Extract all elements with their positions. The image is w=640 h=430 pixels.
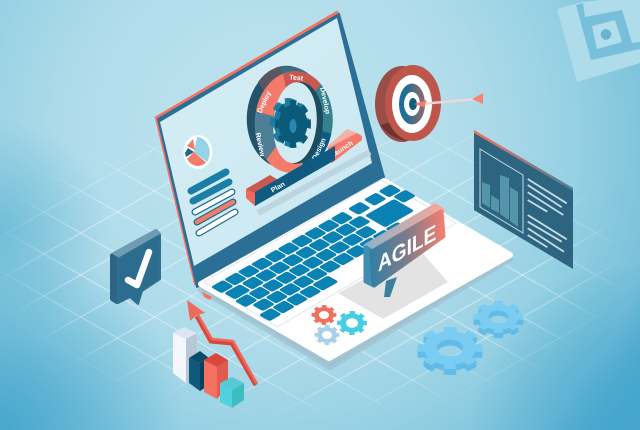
- laptop lid edge: [155, 11, 340, 285]
- agile speech bubble: [366, 206, 443, 297]
- plan bar: Plan: [270, 181, 286, 194]
- keyboard: [211, 183, 452, 321]
- launch tab: [327, 129, 362, 163]
- list pills: [191, 172, 235, 233]
- check mark: [128, 252, 149, 285]
- ring labels: Design: [312, 137, 328, 161]
- navy bar: [189, 351, 209, 391]
- plan bar: [246, 146, 335, 206]
- laptop lid: [158, 14, 384, 287]
- laptop base: [201, 181, 510, 358]
- screen shadow strip: [258, 152, 370, 213]
- red bar: [204, 353, 228, 399]
- agile cycle ring: [243, 63, 328, 171]
- center gear: [270, 98, 311, 148]
- medium gear: [473, 301, 524, 338]
- growth arrow: [187, 300, 257, 385]
- ring labels: Deploy: [257, 90, 273, 114]
- pie chart: [184, 135, 212, 169]
- dashboard board: [474, 130, 573, 269]
- ring labels: [254, 74, 331, 161]
- screen: [160, 18, 372, 266]
- board bars: [482, 175, 518, 227]
- white bar: [173, 327, 197, 383]
- cyan bar: [220, 377, 244, 408]
- ring labels: Review: [254, 132, 266, 158]
- ring labels: Test: [289, 74, 304, 83]
- laptop: [155, 11, 510, 367]
- ring labels: Develop: [318, 87, 331, 115]
- keyboard tray line: [204, 180, 456, 327]
- agile speech bubble: AGILE: [378, 219, 436, 277]
- logo watermark: [557, 0, 640, 82]
- trackpad: [338, 250, 448, 319]
- board text lines: [528, 179, 567, 252]
- launch label: Launch: [330, 140, 355, 159]
- bar chart: [173, 327, 244, 408]
- target with arrow: [375, 65, 483, 142]
- laptop base shadow: [201, 184, 510, 367]
- arrow in target: [414, 93, 483, 107]
- large gear: [417, 327, 483, 375]
- checkmark bubble: [112, 231, 160, 304]
- hinge accent: [202, 292, 212, 300]
- small gears on laptop: [311, 305, 367, 345]
